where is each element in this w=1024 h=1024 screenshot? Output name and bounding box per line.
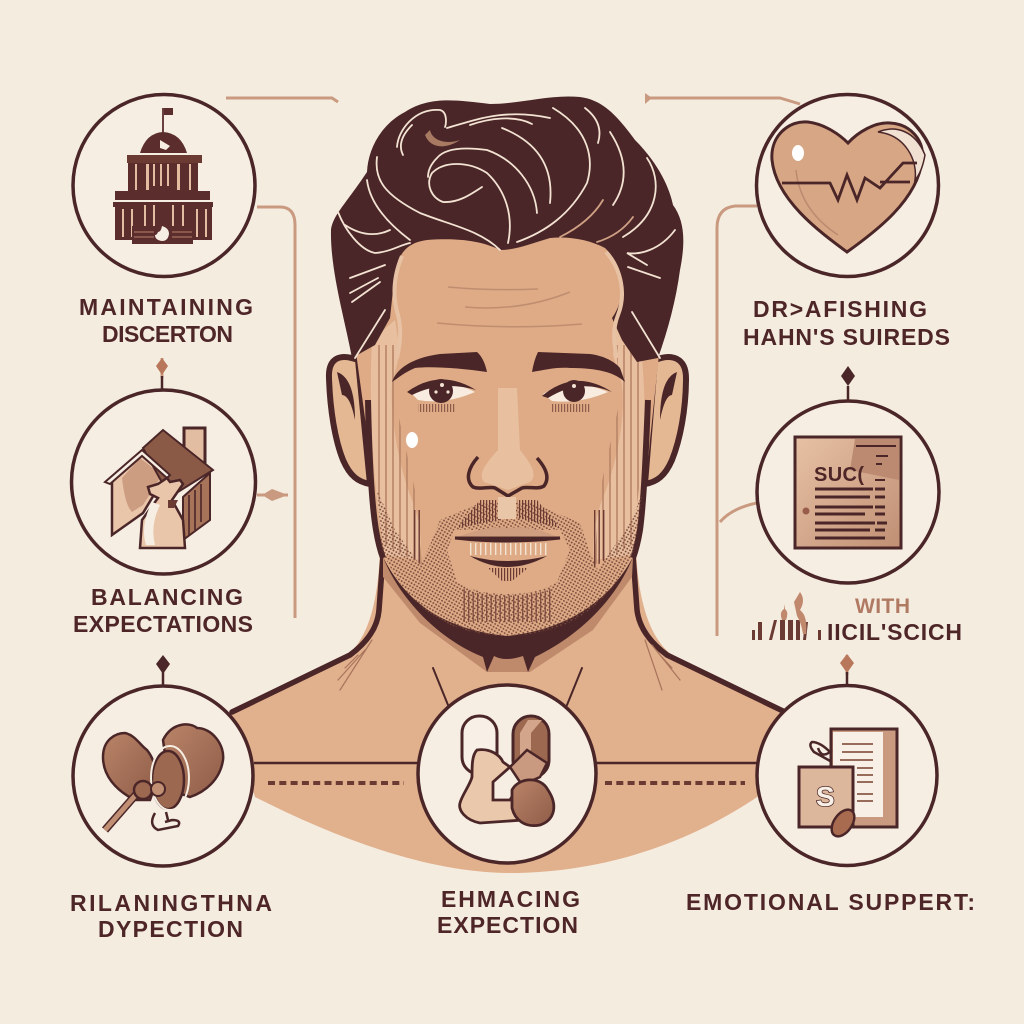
horizontal links [254,763,757,783]
circle [756,94,938,276]
eyebrow right [532,352,625,382]
neck shadow [383,557,633,672]
icon: document and money bag [799,729,897,840]
circle [73,686,253,866]
panel: success document: IICIL'SCICH [827,619,962,645]
circle [418,685,596,863]
panel: relationship dynamics [70,686,272,942]
panel: emotional support [686,686,975,915]
cheek mark [406,432,418,448]
eye right [542,380,612,412]
label: DR>AFISHING [753,296,927,322]
label: EHMACING [441,886,580,912]
eye left [407,379,476,412]
connector diamonds [156,93,855,674]
panel: enhancing expection [418,685,596,938]
icon: heart with pulse [772,122,925,252]
panel: heart health: HAHN'S SUIREDS [743,324,950,350]
circle [757,401,939,583]
icon: document and money bag: S [816,781,835,812]
nose outline [468,457,547,496]
chin hatching [462,588,552,622]
panel: balancing expectations [72,390,256,637]
panel: balancing expectations: EXPECTATIONS [73,611,253,637]
ear left [329,357,370,484]
hair [331,96,683,362]
icon: document [795,437,901,548]
face skin [355,235,660,640]
icon: pills and ginger root [460,716,554,826]
label tan figures [781,592,806,634]
dark stems [162,376,848,686]
panel: relationship dynamics: DYPECTION [98,916,243,942]
hair highlights [338,108,675,358]
mustache hatching [457,500,500,528]
circle [73,94,255,276]
circle [757,686,937,866]
panel: maintaining discretion [73,94,255,347]
neck outlines [232,555,785,712]
label: WITH [855,595,910,618]
side shadows [371,320,421,560]
stubble beard [377,490,643,636]
icon: document: SUC( [814,464,864,486]
label: BALANCING [91,584,243,610]
nose bridge highlight [482,388,534,490]
cheek hatching [376,345,422,565]
panel: heart health [743,94,950,350]
jaw beard shadow [383,557,633,672]
jaw outline [368,400,383,558]
icon: hearts and keys [103,724,223,830]
philtrum [498,497,516,519]
connector lines [162,98,847,675]
icon: capitol building [113,108,213,244]
curl shading [425,130,460,146]
icon: house and hand [105,428,213,548]
hairline highlight [395,252,622,358]
central figure: man portrait [230,96,785,873]
eyebrow left [392,352,487,382]
shoulders and chest [230,550,785,873]
label: EMOTIONAL SUPPERT: [686,889,975,915]
label: RILANINGTHNA [70,890,272,916]
forehead lines [437,287,582,327]
circle [72,390,256,574]
label figures [752,620,821,640]
panel: maintaining discretion: DISCERTON [102,321,233,347]
ear right [645,357,686,484]
label: MAINTAINING [79,294,253,320]
lips [455,527,560,581]
panel: enhancing expection: EXPECTION [437,912,578,938]
panel: success document [752,401,962,645]
